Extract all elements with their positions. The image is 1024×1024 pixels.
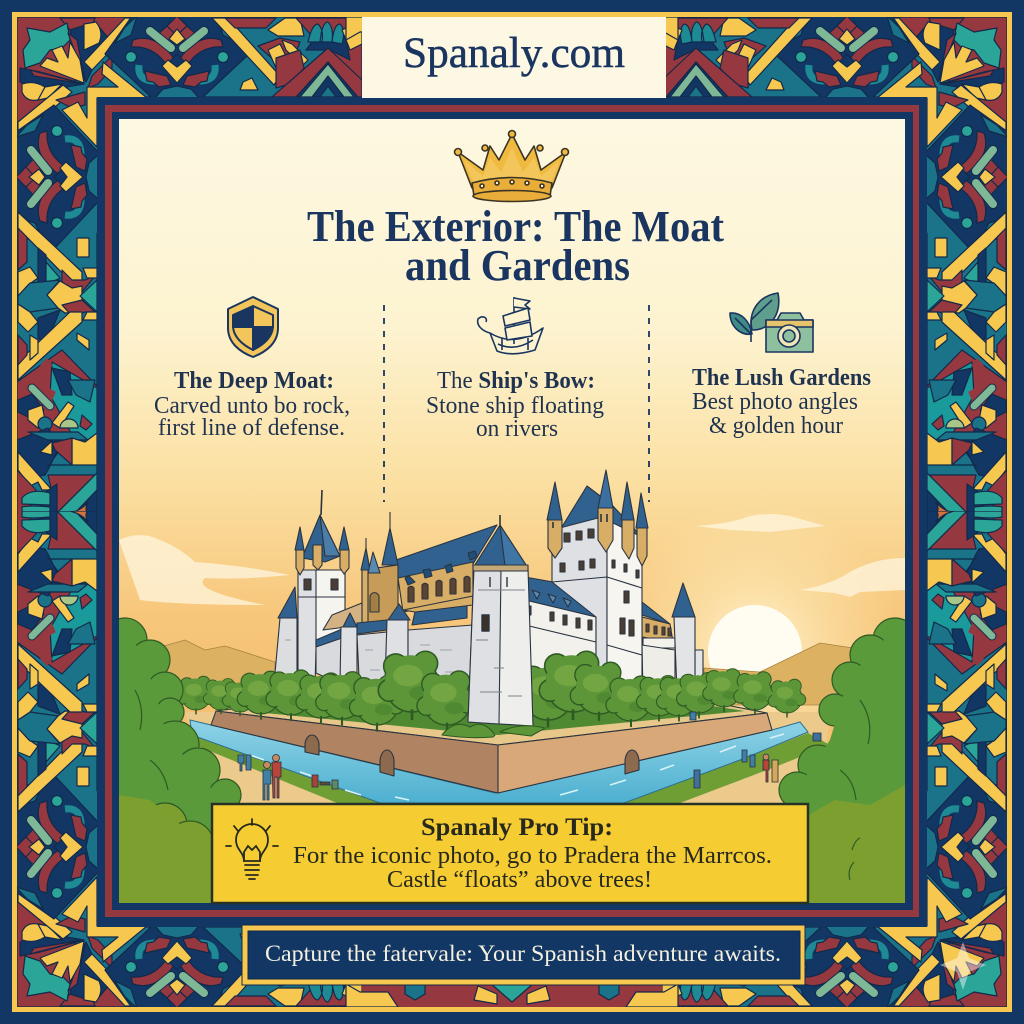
left towers	[274, 490, 362, 695]
pro tip text: Spanaly Pro Tip:	[421, 814, 613, 841]
column divider left	[383, 305, 385, 502]
column: the deep moat: The Deep Moat:	[174, 368, 334, 394]
right forest	[779, 618, 917, 903]
great round tower	[468, 515, 533, 726]
icon: leaf and camera	[730, 293, 813, 352]
title: The Exterior: The Moat	[307, 202, 724, 251]
right low wing and round turret	[642, 583, 703, 695]
column: the ship's bow: on rivers	[476, 416, 558, 442]
tall keep	[547, 470, 648, 693]
logo plate	[362, 17, 666, 98]
icon: shield	[228, 297, 278, 357]
icon: light bulb	[226, 819, 278, 879]
column: the lush gardens	[692, 365, 871, 439]
fort base	[211, 695, 772, 793]
column: the lush gardens: The Lush Gardens	[692, 365, 871, 391]
main panel	[103, 119, 917, 903]
footer banner	[242, 925, 805, 985]
shrubs at fort edge	[442, 724, 545, 738]
hedge of trees at castle foot	[146, 651, 806, 732]
pro tip text	[293, 814, 772, 893]
column: the deep moat: Carved unto bo rock,	[154, 393, 350, 419]
visitors	[238, 712, 821, 800]
distant hills	[150, 640, 866, 705]
title	[307, 202, 724, 290]
icon: ship	[478, 297, 543, 354]
column: the lush gardens: & golden hour	[709, 413, 843, 439]
left forest	[119, 617, 242, 903]
column: the deep moat: first line of defense.	[158, 415, 345, 441]
icon: crown	[454, 130, 568, 202]
sky background	[119, 119, 905, 903]
back tan chapel	[361, 512, 497, 630]
sun and glow	[600, 500, 905, 720]
column divider right	[648, 305, 650, 502]
pro tip text: For the iconic photo, go to Pradera the Marrcos.	[293, 843, 772, 869]
moat water	[190, 720, 808, 803]
title: and Gardens	[405, 241, 630, 290]
column: the deep moat	[154, 368, 350, 441]
right wing	[525, 577, 596, 695]
castle	[146, 470, 806, 793]
column: the ship's bow: The Ship's Bow:	[437, 368, 595, 394]
column: the ship's bow: Stone ship floating	[426, 393, 604, 419]
column: the ship's bow	[426, 368, 604, 442]
pro tip box	[212, 804, 808, 903]
pro tip text: Castle “floats” above trees!	[387, 867, 652, 893]
watermark sparkle	[940, 942, 986, 990]
footer banner: Capture the fatervale: Your Spanish adventure awaits.	[265, 941, 781, 966]
ground and paths	[185, 712, 830, 803]
curtain walls	[285, 596, 473, 698]
column: the lush gardens: Best photo angles	[692, 389, 858, 415]
clouds	[119, 514, 905, 605]
logo plate: Spanaly.com	[403, 30, 625, 77]
